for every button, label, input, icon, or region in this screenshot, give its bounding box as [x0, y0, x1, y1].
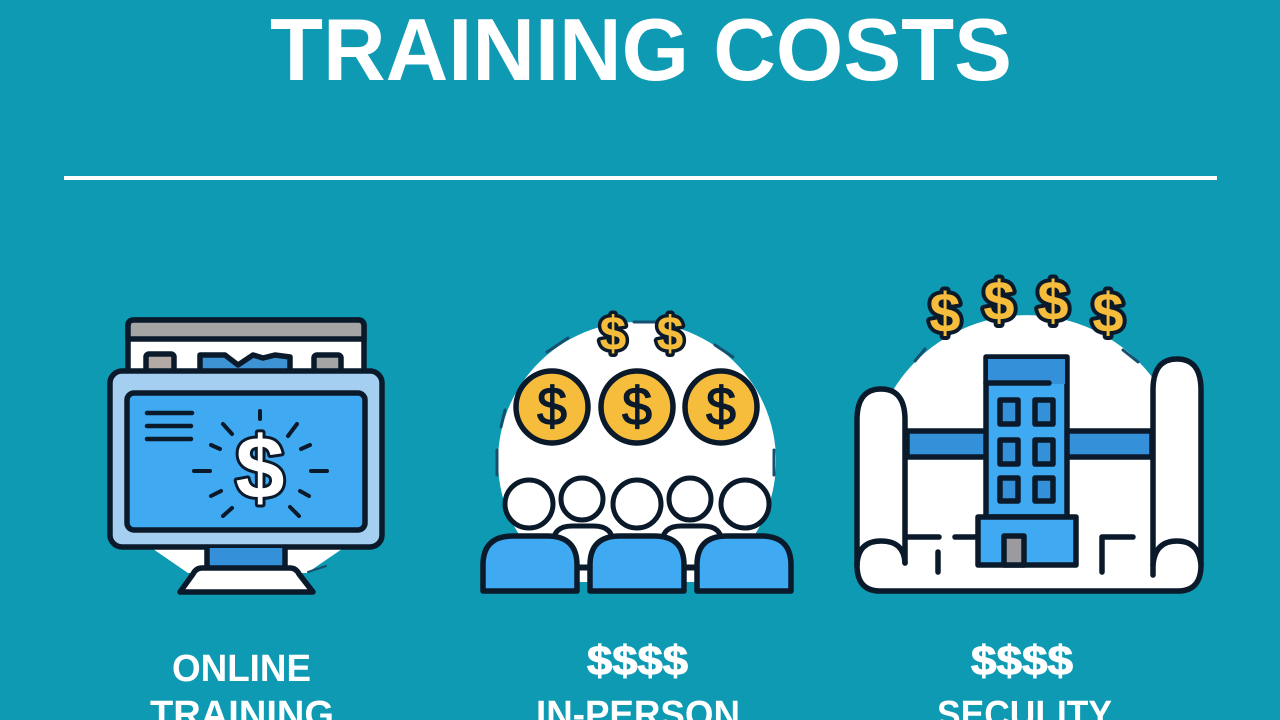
label: online training: ONLINE: [172, 648, 311, 690]
title: TRAINING COSTS: [270, 0, 1012, 99]
dollars above: $: [929, 281, 961, 344]
dollars above: $: [1092, 281, 1124, 344]
icon: online training monitor: [110, 320, 382, 592]
coins: [516, 371, 757, 443]
front row people: [483, 536, 791, 591]
screen text lines: [147, 413, 192, 439]
icon: security building blueprint: [857, 269, 1201, 591]
label: security: $$$$: [971, 637, 1073, 684]
icon: in-person training group: $: [537, 377, 567, 437]
glow rays: [194, 411, 327, 516]
small dollars: $: [600, 308, 627, 361]
floor plan lines: [908, 537, 1133, 572]
dollar sign: $: [236, 418, 284, 517]
small dollars: $: [657, 308, 684, 361]
back row people: [505, 478, 769, 568]
dollars above: $: [983, 269, 1015, 332]
label: security: [937, 637, 1112, 720]
small dollars: [600, 308, 684, 361]
label: in-person: [536, 637, 740, 720]
icon: in-person training group: [483, 308, 791, 591]
dollars above: [929, 269, 1124, 344]
icon: in-person training group: $: [706, 377, 736, 437]
label: in-person: $$$$: [587, 637, 688, 684]
road band: [907, 431, 1152, 457]
building: [986, 357, 1067, 517]
dollars above: $: [1037, 269, 1069, 332]
blueprint sheet: [857, 359, 1201, 591]
icon: in-person training group: $: [622, 377, 652, 437]
label: online training: [150, 648, 334, 720]
